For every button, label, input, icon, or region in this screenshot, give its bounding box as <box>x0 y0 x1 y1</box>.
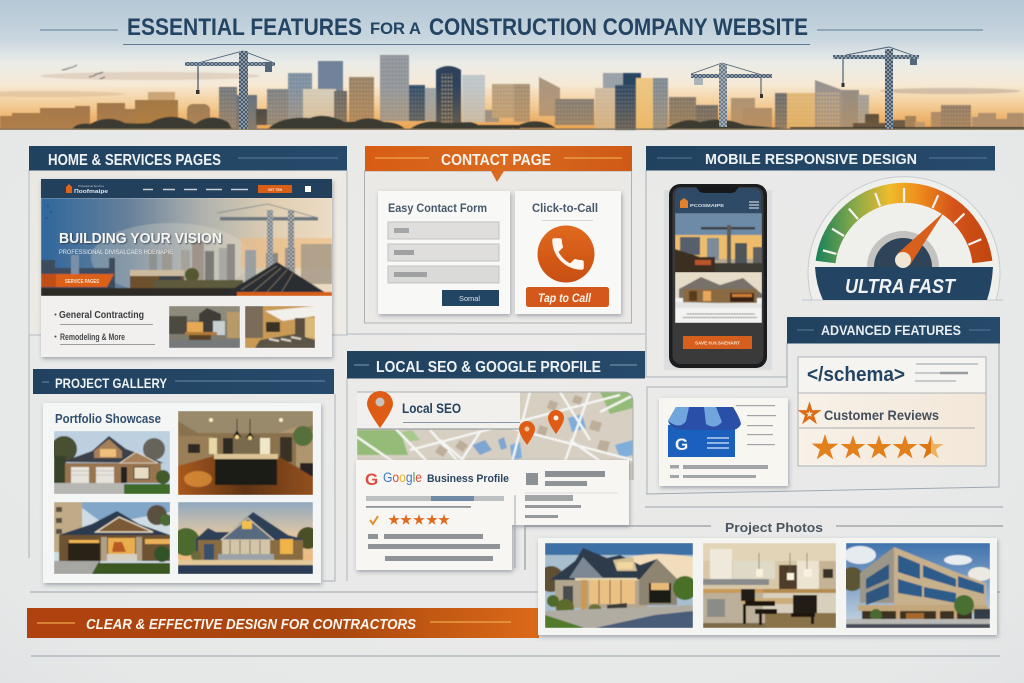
store listing text lines <box>670 405 776 478</box>
photo: craftsman house at dusk <box>54 502 170 574</box>
photo: warm interior <box>245 306 315 348</box>
photo: kitchen interior <box>178 411 313 495</box>
heading: mobile responsive design: MOBILE RESPONSIVE DESIGN <box>705 152 917 168</box>
icon: Google storefront: G <box>675 435 688 454</box>
heading: mobile responsive design <box>646 146 995 170</box>
bottom banner: CLEAR & EFFECTIVE DESIGN FOR CONTRACTORS <box>86 617 416 633</box>
click-to-call heading: Click-to-Call <box>532 201 598 215</box>
title: ESSENTIAL FEATURES <box>127 14 362 41</box>
photo strip card <box>538 538 997 635</box>
heading: local SEO: LOCAL SEO & GOOGLE PROFILE <box>376 359 601 376</box>
local map <box>357 391 640 480</box>
services list <box>54 309 155 344</box>
heading: project gallery <box>33 369 334 394</box>
star rating <box>812 434 943 459</box>
form heading: Easy Contact Form <box>388 201 487 215</box>
heading: contact page <box>365 146 632 182</box>
heading: home and services pages: HOME & SERVICES PAGES <box>48 152 221 169</box>
photo: commercial building <box>846 543 990 628</box>
website hero image <box>41 198 332 296</box>
title: FOR A <box>370 19 421 38</box>
hero headline: BUILDING YOUR VISION <box>59 230 222 247</box>
schema card <box>798 357 986 393</box>
icon: star badge <box>801 406 818 421</box>
website mockup <box>41 179 332 357</box>
heading: home and services pages <box>29 146 347 170</box>
panel: contact page <box>347 146 645 334</box>
icon: map pin <box>519 421 535 445</box>
icon: phone handset <box>538 226 594 282</box>
heading: local SEO label: Local SEO <box>402 400 461 416</box>
send button: Somal <box>459 294 480 303</box>
Google Business Profile heading: G <box>365 470 378 489</box>
tap to call button: Tap to Call <box>538 291 592 305</box>
store profile card <box>659 398 788 486</box>
phone mockup <box>664 184 772 370</box>
icon: middle tower crane <box>691 63 772 127</box>
customer reviews card: Customer Reviews <box>824 407 939 423</box>
phone house image <box>675 272 762 323</box>
panel: Google store listing <box>647 387 788 494</box>
services list: Remodeling & More <box>60 332 125 342</box>
skyline header illustration <box>0 0 1024 130</box>
review text lines <box>368 534 500 561</box>
website navigation bar: Professional Services <box>78 184 104 188</box>
star rating <box>370 514 450 525</box>
title <box>40 14 983 44</box>
photo: two-storey house <box>545 543 693 628</box>
panel: advanced features <box>646 317 1000 494</box>
photo: blue house at sunset <box>178 502 313 574</box>
photo: dining kitchen <box>703 543 836 628</box>
icon: right tower crane <box>833 47 919 129</box>
portfolio card <box>43 403 321 583</box>
phone app logo: PCOSMAIPE <box>690 203 725 209</box>
heading: advanced features: ADVANCED FEATURES <box>821 323 961 338</box>
website navigation bar <box>41 179 332 198</box>
heading: advanced features <box>787 317 1000 344</box>
gauge label: ULTRA FAST <box>845 276 957 298</box>
click-to-call card <box>515 191 621 314</box>
phone hero image <box>675 213 762 272</box>
phone app logo <box>680 198 725 209</box>
Google Business Profile heading: Business Profile <box>427 473 509 485</box>
panel: project gallery <box>29 335 335 583</box>
speed gauge <box>802 177 1003 300</box>
Google Business Profile heading: Google <box>383 470 422 485</box>
panel: home and services pages <box>29 146 347 357</box>
contact form card <box>378 191 510 314</box>
panel: project photos <box>525 520 1003 635</box>
bottom banner <box>27 608 539 638</box>
heading: project photos: Project Photos <box>725 520 823 535</box>
customer reviews card <box>798 393 986 466</box>
title: CONSTRUCTION COMPANY WEBSITE <box>429 14 808 41</box>
heading: local SEO <box>347 351 645 378</box>
hero subtitle: PROFESSIONAL DIVISALCAES HOENAPIE <box>59 249 174 256</box>
website navigation bar: GET TEN <box>268 188 282 192</box>
heading: project gallery: PROJECT GALLERY <box>55 375 168 391</box>
hero call-to-action label: SERVICE PAGES <box>65 279 99 285</box>
photo: two-car garage house <box>54 431 170 494</box>
Google Business Profile card <box>356 460 629 570</box>
heading: contact page: CONTACT PAGE <box>441 152 551 169</box>
icon: map pin <box>548 410 564 434</box>
panel: local SEO and Google profile <box>347 351 645 581</box>
website navigation bar: Ποofmaipe <box>74 189 108 195</box>
Google Business Profile heading <box>365 470 509 489</box>
portfolio heading: Portfolio Showcase <box>55 411 161 426</box>
photo: dark interior <box>169 306 240 348</box>
review summary bars <box>366 496 504 508</box>
services list: General Contracting <box>59 309 144 321</box>
form fields <box>388 222 499 283</box>
business info lines <box>515 471 618 568</box>
phone call-to-action button <box>683 336 752 349</box>
icon: large map pin <box>367 391 393 428</box>
schema card: </schema> <box>807 364 905 386</box>
phone call-to-action button: SAVE H.H.SAEHART <box>695 340 740 346</box>
icon: left tower crane <box>185 51 275 129</box>
panel: mobile responsive design <box>646 146 1003 377</box>
